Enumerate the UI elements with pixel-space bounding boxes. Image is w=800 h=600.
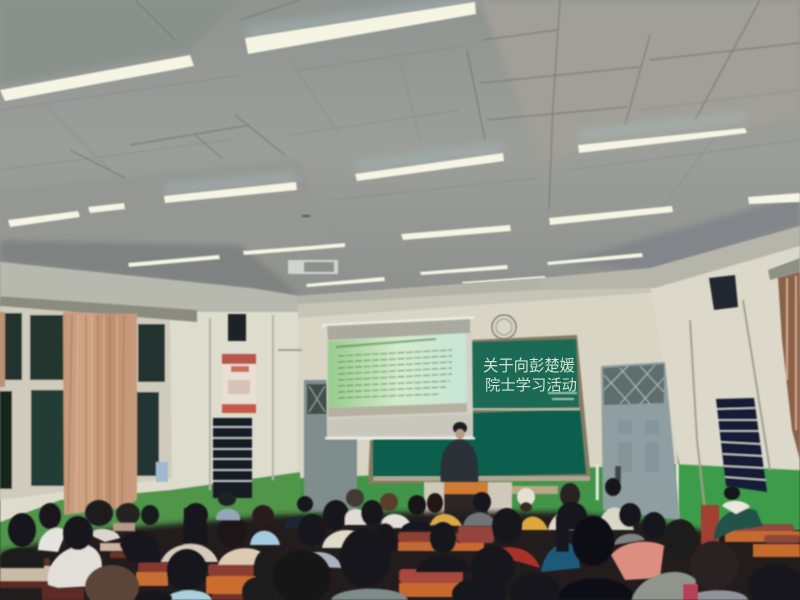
student — [541, 502, 587, 572]
black grid board left — [213, 418, 252, 498]
student — [38, 503, 66, 552]
right wall — [650, 240, 800, 480]
left wall — [0, 262, 300, 525]
student — [663, 519, 697, 557]
lecturer — [440, 422, 478, 484]
student — [250, 505, 280, 545]
student — [345, 489, 366, 525]
student — [517, 488, 548, 530]
walls — [0, 226, 800, 570]
student — [373, 523, 397, 557]
student — [48, 516, 102, 588]
back wall — [298, 282, 680, 490]
student — [0, 513, 44, 568]
student — [322, 500, 370, 548]
near desks — [399, 569, 463, 583]
left door — [304, 380, 357, 512]
ceiling lights — [0, 0, 800, 287]
student — [136, 591, 172, 600]
blackboard small note — [548, 392, 577, 400]
student — [331, 528, 408, 600]
student — [85, 565, 139, 600]
student — [380, 493, 412, 528]
blackboard — [368, 335, 591, 484]
student — [166, 549, 212, 600]
student — [714, 486, 763, 540]
clock — [492, 315, 516, 339]
student — [632, 572, 696, 600]
green dado — [0, 472, 305, 570]
student — [683, 541, 748, 600]
student — [85, 500, 120, 542]
student — [452, 578, 506, 600]
student — [471, 546, 515, 590]
projector screen — [322, 316, 475, 440]
student — [113, 503, 140, 531]
student — [254, 549, 282, 585]
student — [400, 495, 436, 530]
students: middle row — [48, 502, 697, 600]
right door — [601, 362, 680, 520]
student — [463, 492, 497, 526]
blackboard sub-heading: 院士学习活动 — [485, 376, 577, 394]
red poster — [222, 354, 256, 413]
student — [284, 496, 322, 528]
centre desks — [398, 532, 458, 542]
student — [216, 492, 240, 520]
wall sign near ceiling — [288, 215, 338, 274]
black grid board right — [716, 398, 767, 492]
student — [361, 500, 383, 526]
far right desks — [701, 505, 719, 545]
student — [295, 514, 342, 568]
podium — [424, 482, 558, 518]
ceiling — [0, 0, 800, 300]
students: back row — [0, 478, 763, 568]
blackboard heading: 关于向彭楚媛 — [483, 357, 575, 375]
student — [120, 505, 162, 562]
student — [598, 478, 634, 530]
left windows and curtain — [0, 296, 197, 515]
floor and seating shadow — [0, 512, 800, 600]
student — [510, 573, 560, 600]
student — [748, 564, 800, 600]
students: front row — [136, 516, 800, 600]
student — [161, 503, 218, 562]
student — [217, 516, 270, 565]
student — [242, 577, 274, 600]
student — [490, 508, 540, 568]
student — [273, 550, 331, 600]
desks and chairs — [0, 505, 800, 600]
student — [614, 503, 645, 545]
right curtain — [768, 258, 800, 460]
student — [556, 516, 636, 600]
student — [548, 483, 590, 530]
student — [611, 512, 666, 580]
student — [427, 493, 462, 526]
speakers — [228, 275, 738, 341]
student — [416, 522, 472, 572]
